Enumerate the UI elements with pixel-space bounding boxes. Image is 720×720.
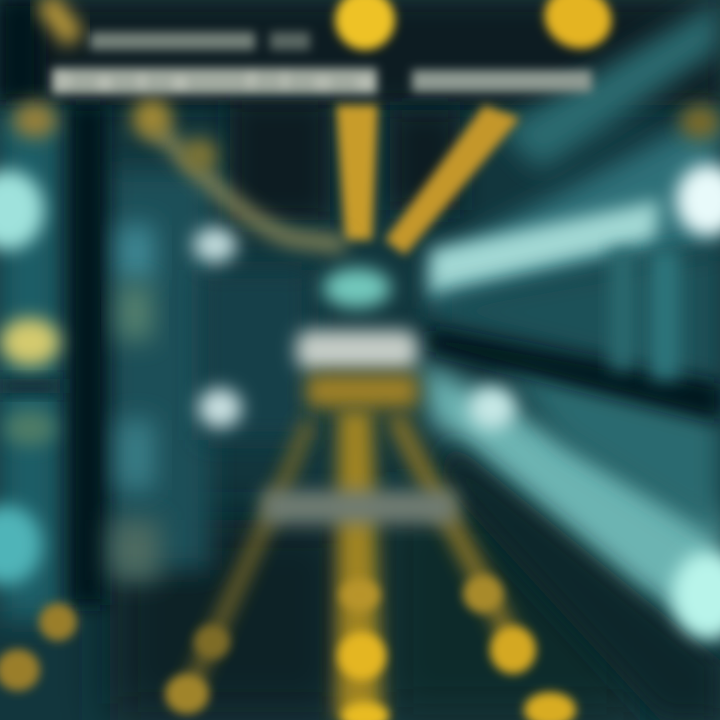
title: Data flow bbox=[52, 66, 378, 96]
icon: glowing orbs, left and right bbox=[0, 164, 720, 639]
chart: lower flow lines bbox=[0, 410, 576, 720]
panel: right perspective wall bbox=[420, 0, 720, 720]
central hub bbox=[296, 268, 418, 408]
chart: upper flow lines into hub bbox=[13, 0, 720, 255]
title bbox=[52, 32, 592, 96]
panel: left wall bbox=[0, 0, 310, 620]
